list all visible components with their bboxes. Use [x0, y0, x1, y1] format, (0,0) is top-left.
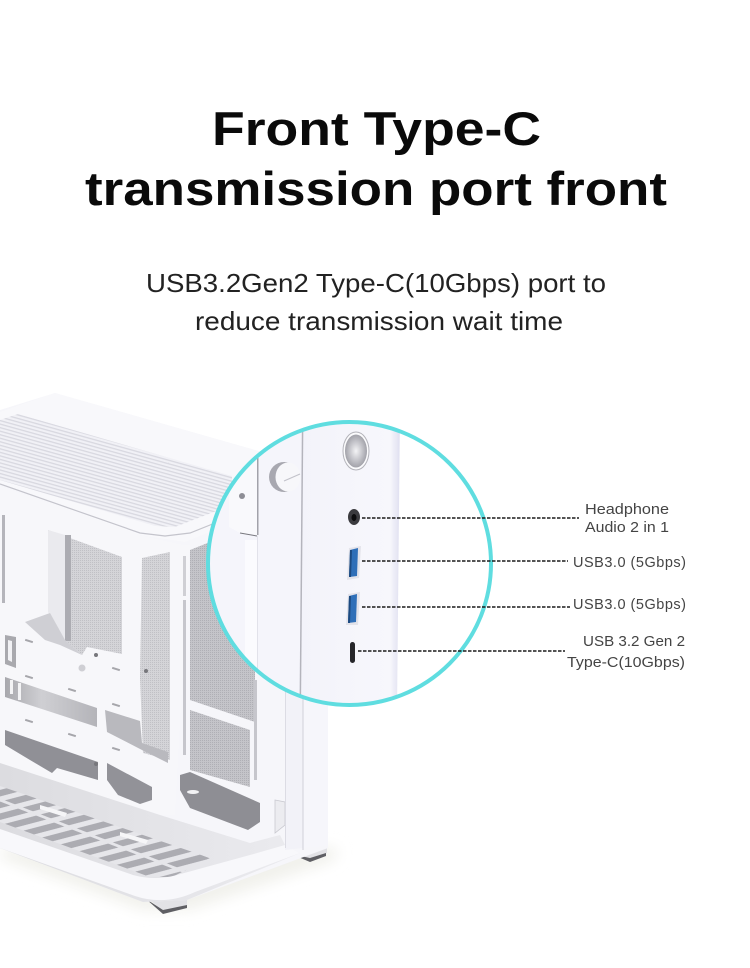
icon: USB 3.0 port	[347, 546, 361, 580]
expansion bracket cutouts	[5, 635, 168, 804]
label: USB3.0: USB3.0 (5Gbps)	[573, 597, 686, 613]
leader lines	[358, 518, 579, 651]
front panel column	[285, 690, 328, 850]
magnified front panel	[300, 410, 400, 710]
label: USB-C	[567, 634, 685, 671]
top panel	[0, 393, 262, 542]
icon: audio jack	[348, 509, 360, 525]
magnified port circle	[200, 410, 491, 710]
label: USB-C: USB 3.2 Gen 2	[583, 634, 685, 650]
subtitle	[146, 268, 606, 336]
case body	[0, 393, 328, 902]
title	[85, 102, 667, 215]
title: Front Type-C	[212, 102, 541, 155]
icon: USB 3.0 port	[346, 592, 360, 625]
rear wall	[0, 486, 190, 815]
label: headphone audio: Audio 2 in 1	[585, 520, 669, 536]
label: headphone audio: Headphone	[585, 502, 669, 518]
icon: small case screw	[239, 493, 245, 499]
icon: power button	[343, 432, 369, 470]
side chamber mesh panes	[180, 540, 299, 833]
icon: USB-C port	[350, 642, 355, 663]
title: transmission port front	[85, 162, 667, 215]
rear mesh openings	[2, 515, 170, 760]
port labels	[567, 502, 686, 671]
product: white PC case	[0, 393, 338, 914]
subtitle: reduce transmission wait time	[195, 306, 563, 336]
case feet	[145, 843, 327, 914]
case floor	[0, 763, 300, 902]
floor shadow	[0, 848, 338, 910]
subtitle: USB3.2Gen2 Type-C(10Gbps) port to	[146, 268, 606, 298]
label: USB-C: Type-C(10Gbps)	[567, 655, 685, 671]
label: headphone audio	[585, 502, 669, 536]
label: USB3.0: USB3.0 (5Gbps)	[573, 555, 686, 571]
magnified side panel	[210, 433, 302, 694]
icon: thumb screw	[269, 462, 300, 492]
